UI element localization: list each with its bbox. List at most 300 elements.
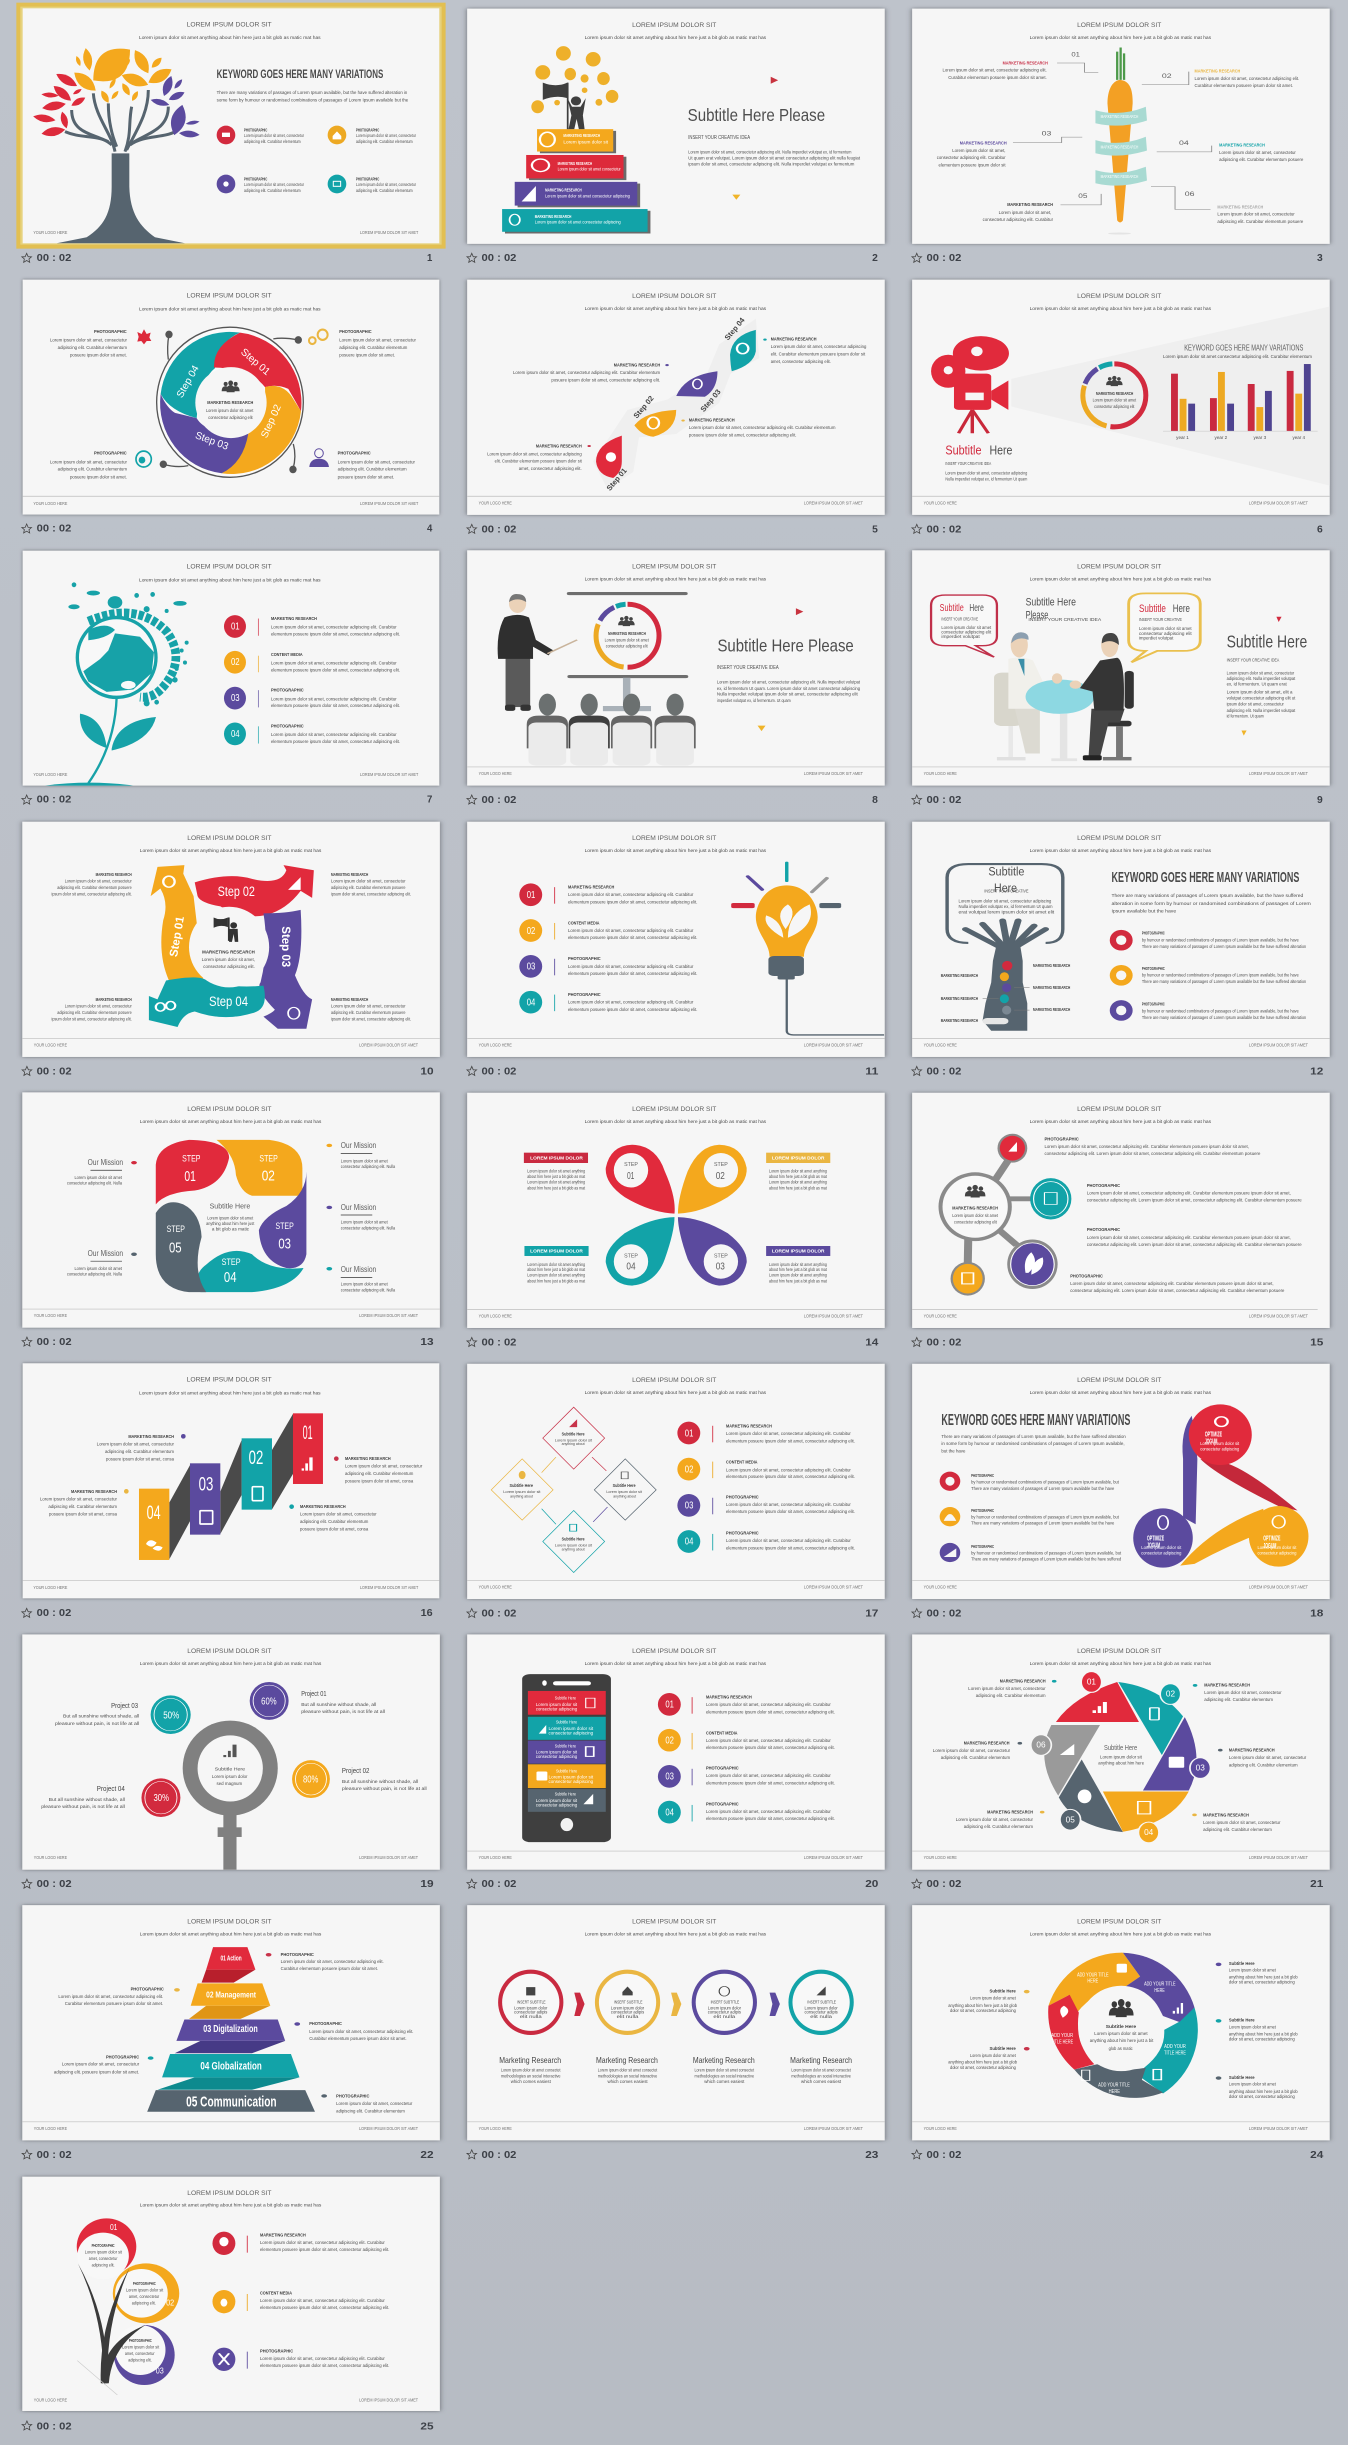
- items: PHOTOGRAPHIC: [1142, 931, 1165, 936]
- header: LOREM IPSUM DOLOR SIT: [632, 292, 717, 299]
- caption: 10: [420, 1066, 434, 1077]
- chart: linked circles: OPTIMIZE: [1147, 1535, 1164, 1543]
- chart: segmented ring: Lorem ipsum dolor sit amet: [1094, 2031, 1148, 2037]
- labels: about him here just a bit glob as mat: [769, 1186, 827, 1191]
- labels: consectetur adipiscing elit. Nulla: [67, 1181, 122, 1186]
- chart: arrow cycle: Step 02: [218, 884, 255, 900]
- footer: LOREM IPSUM DOLOR SIT AMET: [804, 501, 863, 506]
- chart: diamonds: [491, 1407, 656, 1572]
- chart: balloons: adipiscing elit.: [132, 2301, 156, 2306]
- chart: petals: 04: [626, 1261, 636, 1272]
- chart: segmented ring: glob as matic: [1109, 2046, 1133, 2051]
- chart: diamonds: anything about: [510, 1495, 533, 1499]
- labels: anything about him here just a bit glob: [948, 2003, 1017, 2008]
- caption: [22, 1608, 433, 1619]
- labels: Lorem ipsum dolor sit amet: [970, 1996, 1016, 2001]
- chart: balloons: PHOTOGRAPHIC: [133, 2281, 156, 2286]
- labels: PHOTOGRAPHIC: [94, 451, 127, 457]
- chart: pyramid: 01 Action: [220, 1955, 242, 1963]
- list: 04: [231, 729, 240, 740]
- caption: 00 : 02: [481, 1337, 517, 1348]
- labels: Marketing Research: [790, 2056, 852, 2065]
- labels: [524, 1153, 830, 1284]
- caption: 00 : 02: [37, 2149, 72, 2161]
- chart: arrow cycle: Step 04: [209, 995, 248, 1010]
- list: CONTENT MEDIA: [271, 652, 303, 658]
- header: Lorem ipsum dolor sit amet anything about him here just a bit glob as matic mat has: [1030, 848, 1211, 854]
- labels: adipiscing elit. Curabitur elementum: [941, 1756, 1010, 1761]
- caption: 00 : 02: [481, 252, 517, 264]
- footer: YOUR LOGO HERE: [479, 1855, 512, 1861]
- chart: diamonds: Lorem ipsum dolor sit: [555, 1438, 592, 1443]
- labels: 03: [1042, 130, 1051, 137]
- chart: segmented ring: ADD YOUR: [1164, 2043, 1186, 2049]
- paragraph: some form by humour or randomised combinations of passages of Lorem Ipsum available but the: [217, 97, 409, 102]
- items: adipiscing elit. Curabitur elementum: [356, 139, 413, 144]
- labels: adipiscing elit. Curabitur elementum: [1204, 1697, 1273, 1702]
- caption: [22, 2149, 434, 2161]
- chart: linked circles: OPTIMIZE: [1205, 1431, 1222, 1439]
- callout: red: Here: [969, 602, 984, 614]
- header: [1030, 834, 1211, 854]
- list: 02: [665, 1735, 674, 1746]
- labels: posuere ipsum dolor sit amet, consa: [300, 1526, 369, 1531]
- header: [140, 1105, 321, 1124]
- items: PHOTOGRAPHIC: [356, 176, 380, 181]
- footer: LOREM IPSUM DOLOR SIT AMET: [360, 230, 419, 235]
- icon: magnifier: Lorem ipsum dolor: [212, 1774, 247, 1780]
- list: 03: [231, 693, 240, 704]
- labels: posuere ipsum dolor sit amet.: [70, 353, 127, 358]
- subtitle block: ex, id fermentum. Ut quam erat: [1227, 682, 1287, 687]
- subtitle block: [717, 637, 860, 703]
- illustration: phone: consectetur adipiscing: [536, 1755, 578, 1760]
- header: [139, 563, 322, 583]
- labels: Lorem ipsum dolor sit amet anything: [769, 1273, 827, 1278]
- header: [139, 292, 322, 311]
- footer: LOREM IPSUM DOLOR SIT AMET: [360, 1585, 419, 1590]
- subtitle block: Subtitle Here Please: [688, 107, 825, 126]
- list: 04: [685, 1536, 693, 1548]
- caption: 00 : 02: [926, 1337, 962, 1348]
- chart: aperture: Lorem ipsum dolor sit: [1100, 1755, 1142, 1760]
- labels: Lorem ipsum dolor sit amet: [74, 1175, 122, 1180]
- header: LOREM IPSUM DOLOR SIT: [632, 1647, 717, 1654]
- labels: MARKETING RESEARCH: [96, 872, 132, 877]
- caption: [912, 794, 1323, 806]
- labels: adipiscing elit. Curabitur elementum: [1229, 1763, 1298, 1768]
- chart: rings: INSERT SUBTITLE: [614, 2000, 642, 2005]
- subtitle block: Here: [989, 443, 1012, 457]
- labels: ipsum dolor sit amet, consectetur adipiscing elit.: [331, 892, 411, 897]
- chart: linked circles: consectetur adipiscing: [1200, 1447, 1240, 1452]
- labels: Lorem ipsum dolor sit amet: [74, 1266, 122, 1271]
- chart: rising blocks: 03: [199, 1474, 213, 1495]
- labels: Lorem ipsum dolor sit amet, consectetur: [97, 1441, 175, 1446]
- slide 11: light bulb: [467, 822, 885, 1077]
- header: Lorem ipsum dolor sit amet anything about him here just a bit glob as matic mat has: [585, 306, 766, 311]
- chart: petals: 03: [716, 1261, 725, 1272]
- illustration: tree with frame: MARKETING RESEARCH: [941, 1018, 978, 1023]
- list: PHOTOGRAPHIC: [726, 1495, 759, 1500]
- labels: [52, 872, 411, 1022]
- caption: 00 : 02: [37, 1066, 72, 1077]
- illustration: phone: Subtitle Here: [555, 1792, 576, 1797]
- callout: gold: [1129, 593, 1200, 662]
- caption: 00 : 02: [37, 2420, 72, 2432]
- labels: 05: [1078, 192, 1087, 200]
- caption: 21: [1310, 1878, 1323, 1890]
- header: LOREM IPSUM DOLOR SIT: [187, 1647, 272, 1654]
- chart: segmented ring: TITLE HERE: [1051, 2038, 1073, 2045]
- illustration: board with donut: Lorem ipsum dolor sit amet: [605, 638, 649, 643]
- slide 6: camera and bars: Lorem ipsum dolor sit amet, consectetur adipiscing: [945, 471, 1028, 476]
- labels: consectetur adipiscing elit. Nulla: [341, 1226, 396, 1231]
- list: elementum posuere ipsum dolor sit amet, consectetur adipiscing elit.: [726, 1475, 855, 1480]
- footer: YOUR LOGO HERE: [33, 772, 67, 777]
- icon: markers: [1241, 617, 1282, 736]
- illustration: board with donut: MARKETING RESEARCH: [608, 631, 646, 636]
- illustration: audience: [527, 694, 696, 766]
- connectors: [163, 334, 298, 469]
- chart: molecule: consectetur adipiscing elit: [954, 1220, 997, 1225]
- labels: Lorem ipsum dolor sit amet anything: [527, 1262, 586, 1267]
- labels: Lorem ipsum dolor sit amet consectet: [501, 2068, 561, 2073]
- footer: [912, 2122, 1330, 2131]
- header: LOREM IPSUM DOLOR SIT: [187, 2189, 272, 2196]
- chart: molecule: [939, 1134, 1071, 1296]
- labels: consectetur adipiscing elit. Nulla: [341, 1165, 396, 1170]
- caption: [912, 1608, 1323, 1619]
- footer: LOREM IPSUM DOLOR SIT AMET: [804, 771, 863, 776]
- labels: about him here just a bit glob as mat: [769, 1279, 827, 1284]
- chart: rings: Lorem ipsum dolor: [611, 2006, 644, 2011]
- center text: consectetur adipiscing elit.: [203, 964, 255, 970]
- chart: petals: STEP: [624, 1252, 638, 1259]
- chart: five step shapes: 04: [224, 1270, 237, 1286]
- chart: balloons: adipiscing elit.: [92, 2263, 115, 2268]
- chart: percent bubbles: 30%: [153, 1792, 169, 1803]
- header: LOREM IPSUM DOLOR SIT: [187, 1105, 272, 1112]
- labels: MARKETING RESEARCH: [964, 1741, 1010, 1746]
- items: PHOTOGRAPHIC: [1142, 966, 1165, 971]
- chart: rising blocks: 02: [249, 1448, 263, 1469]
- list: elementum posuere ipsum dolor sit amet, consectetur adipiscing elit.: [271, 631, 400, 637]
- labels: Marketing Research: [499, 2056, 561, 2065]
- chart: segmented ring: TITLE HERE: [1164, 2049, 1186, 2056]
- chart: balloons: Lorem ipsum dolor sit: [126, 2288, 163, 2293]
- slide 24: segmented ring: [912, 1905, 1330, 2161]
- labels: Lorem ipsum dolor sit amet anything: [527, 1169, 586, 1174]
- chart: rings: INSERT SUBTITLE: [807, 2000, 836, 2005]
- chart: circular steps: Lorem ipsum dolor sit amet: [206, 408, 254, 413]
- labels: PHOTOGRAPHIC: [1087, 1228, 1120, 1233]
- labels: Lorem ipsum dolor sit amet: [341, 1159, 388, 1164]
- footer: YOUR LOGO HERE: [33, 501, 67, 506]
- header: [140, 1918, 321, 1937]
- chart: diamonds: anything about: [613, 1495, 636, 1499]
- chart: rings: Lorem ipsum dolor: [708, 2006, 741, 2011]
- chart: bars: year 4: [1292, 436, 1305, 441]
- labels: Lorem ipsum dolor sit amet, consectetur: [50, 337, 128, 342]
- list: Lorem ipsum dolor sit amet, consectetur adipiscing elit. Curabitur: [271, 660, 397, 666]
- caption: 15: [1310, 1337, 1323, 1348]
- illustration: board with donut: consectetur adipiscing elit: [606, 644, 648, 649]
- slide 12: hand tree: MARKETING RESEARCH: [1033, 963, 1070, 968]
- labels: Lorem ipsum dolor sit amet: [1229, 2025, 1276, 2030]
- caption: 00 : 02: [481, 1066, 517, 1077]
- list: CONTENT MEDIA: [260, 2291, 292, 2296]
- labels: adipiscing elit. posuere ipsum dolor sit amet.: [54, 2070, 139, 2075]
- labels: posuere ipsum dolor sit amet, consectetur adipiscing elit.: [689, 433, 797, 438]
- labels: 02: [1162, 72, 1172, 79]
- slide 21: aperture: [912, 1634, 1330, 1890]
- list: elementum posuere ipsum dolor sit amet, consectetur adipiscing elit.: [706, 1817, 835, 1822]
- caption: 12: [1310, 1066, 1323, 1077]
- chart: segmented ring: HERE: [1109, 2088, 1120, 2094]
- list: elementum posuere ipsum dolor sit amet, consectetur adipiscing elit.: [726, 1546, 855, 1551]
- callout: red: Lorem ipsum dolor sit amet: [941, 625, 991, 630]
- illustration: presenter: [498, 594, 577, 711]
- center text: MARKETING RESEARCH: [202, 950, 255, 955]
- caption: 00 : 02: [926, 2149, 962, 2161]
- header: [585, 1647, 766, 1666]
- chart: circular steps: Step 02: [259, 403, 284, 440]
- chart: aperture: 04: [1144, 1828, 1153, 1837]
- list: Lorem ipsum dolor sit amet, consectetur adipiscing elit. Curabitur: [260, 2298, 385, 2303]
- header: [1030, 1376, 1211, 1396]
- stair blocks: MARKETING RESEARCH: [563, 133, 600, 139]
- illustration: tree with frame: Lorem ipsum dolor sit amet, consectetur adipiscing: [959, 899, 1052, 904]
- list: [224, 615, 400, 745]
- chart: five step shapes: STEP: [182, 1153, 200, 1164]
- labels: adipiscing elit. Curabitur elementum: [336, 2109, 405, 2114]
- footer: YOUR LOGO HERE: [479, 2126, 512, 2131]
- labels: Lorem ipsum dolor sit amet, consectetur adipiscing: [487, 452, 582, 457]
- chart: balloons: 01: [110, 2222, 118, 2232]
- labels: adipiscing elit. Curabitur elementum: [48, 1504, 117, 1509]
- labels: PHOTOGRAPHIC: [106, 2055, 139, 2060]
- labels: MARKETING RESEARCH: [689, 418, 735, 423]
- caption: 11: [865, 1066, 878, 1077]
- stair blocks: MARKETING RESEARCH: [535, 214, 572, 220]
- subtitle block: id fermentum. Ut quam: [1227, 714, 1264, 719]
- labels: adipiscing elit. Curabitur elementum posuere: [331, 885, 406, 890]
- labels: dolor sit amet, consectetur adipiscing: [950, 2065, 1016, 2070]
- footer: [22, 2122, 440, 2131]
- labels: about him here just a bit glob as mat: [527, 1175, 585, 1180]
- slide 12: hand tree: MARKETING RESEARCH: [1033, 1008, 1070, 1013]
- chart: five step shapes: Subtitle Here: [210, 1203, 250, 1211]
- footer: [467, 1851, 885, 1861]
- chart: circular steps: [157, 327, 303, 477]
- subtitle block: INSERT YOUR CREATIVE IDEA: [717, 665, 779, 670]
- slide 7: globe flower: [22, 551, 439, 806]
- labels: Lorem ipsum dolor sit amet, consectetur adipiscing: [771, 345, 867, 350]
- caption: 24: [1310, 2149, 1323, 2161]
- labels: consectetur adipiscing elit. Nulla: [341, 1288, 396, 1293]
- footer: [34, 2398, 418, 2403]
- labels: [937, 51, 1304, 224]
- illustration: tree with frame: MARKETING RESEARCH: [941, 996, 978, 1001]
- chart: rings: [498, 1970, 854, 2035]
- chart: leaf steps: [593, 315, 759, 493]
- chart: five step shapes: Lorem ipsum dolor sit amet: [207, 1216, 253, 1221]
- header: [585, 1376, 766, 1396]
- footer: YOUR LOGO HERE: [924, 1314, 957, 1319]
- caption: [912, 1337, 1323, 1348]
- caption: [912, 1066, 1323, 1077]
- list: Lorem ipsum dolor sit amet, consectetur adipiscing elit. Curabitur: [568, 964, 693, 969]
- list: Lorem ipsum dolor sit amet, consectetur adipiscing elit. Curabitur: [260, 2241, 385, 2245]
- caption: 00 : 02: [37, 1878, 72, 1890]
- stair blocks: [502, 129, 650, 234]
- labels: [487, 337, 867, 472]
- chart: balloons: amet, consectetur: [89, 2256, 117, 2261]
- labels: dolor sit amet, consectetur adipiscing: [1229, 1980, 1295, 1985]
- caption: 00 : 02: [926, 524, 962, 535]
- items: There are many variations of passages of Lorem Ipsum available but the have: [971, 1521, 1115, 1526]
- callout: red: consectetur adipiscing elit: [941, 630, 991, 635]
- subtitle block: Lorem ipsum dolor sit amet, consectetur adipiscing elit. Nulla imperdiet volutpat: [717, 680, 860, 685]
- chart: linked circles: consectetur adipiscing: [1141, 1551, 1182, 1556]
- list: CONTENT MEDIA: [568, 921, 600, 926]
- list: PHOTOGRAPHIC: [271, 688, 304, 694]
- header: [1030, 21, 1211, 40]
- labels: pleasure without pain, is not life at all: [41, 1804, 125, 1810]
- labels: Curabitur elementum posuere ipsum dolor sit amet.: [65, 2001, 163, 2007]
- labels: adipiscing elit. Curabitur elementum posuere: [57, 1010, 132, 1015]
- labels: Lorem ipsum dolor sit amet, consectetur adipiscing elit. Curabitur elementum: [513, 370, 660, 376]
- list: elementum posuere ipsum dolor sit amet, consectetur adipiscing elit.: [568, 971, 698, 976]
- footer: LOREM IPSUM DOLOR SIT AMET: [804, 1585, 863, 1590]
- caption: [22, 1878, 434, 1890]
- labels: adipiscing elit. Curabitur elementum: [338, 467, 407, 472]
- labels: Project 04: [97, 1785, 125, 1793]
- labels: MARKETING RESEARCH: [614, 363, 660, 368]
- header: [1030, 563, 1211, 582]
- labels: pleasure without pain, is not life at all: [55, 1721, 139, 1726]
- labels: [40, 1434, 423, 1531]
- labels: [50, 329, 416, 480]
- chart: molecule: Lorem ipsum dolor sit amet: [952, 1213, 998, 1218]
- chart: balloons: 02: [166, 2298, 174, 2308]
- paragraph: in some form by humour or randomised combinations of passages of Lorem Ipsum available,: [941, 1441, 1125, 1447]
- labels: elit. Curabitur elementum posuere ipsum dolor sit: [771, 352, 865, 357]
- chart: rings: Lorem ipsum dolor: [514, 2006, 547, 2011]
- header: LOREM IPSUM DOLOR SIT: [1077, 21, 1162, 28]
- illustration: phone: Lorem ipsum dolor sit: [536, 1750, 577, 1755]
- chart: rings: Lorem ipsum dolor: [805, 2006, 838, 2011]
- labels: MARKETING RESEARCH: [1000, 1679, 1046, 1684]
- list: Lorem ipsum dolor sit amet, consectetur adipiscing elit. Curabitur: [706, 1809, 831, 1814]
- labels: methodologies an social interactive: [791, 2074, 851, 2079]
- subtitle block: imperdiet volutpat ex, id fermentum. Ut quam: [717, 698, 791, 703]
- header: Lorem ipsum dolor sit amet anything about him here just a bit glob as matic mat has: [585, 577, 766, 582]
- items: PHOTOGRAPHIC: [971, 1474, 994, 1479]
- header: [585, 1918, 766, 1937]
- chart: bars: [1163, 364, 1318, 441]
- header: Lorem ipsum dolor sit amet anything about him here just a bit glob as matic mat has: [1030, 306, 1211, 311]
- chart: segmented ring: ADD YOUR TITLE: [1098, 2081, 1130, 2088]
- subtitle block: Lorem ipsum dolor sit amet, consectetur adipiscing elit. Nulla imperdiet volutpat ex, id fermentum: [688, 150, 851, 155]
- icon: coins and flag figure: [531, 46, 618, 129]
- subtitle block: Subtitle Here Please: [717, 637, 854, 656]
- chart: five step shapes: 05: [169, 1240, 182, 1256]
- chart: rings: elit nulla: [617, 2015, 639, 2020]
- labels: Lorem ipsum dolor sit amet, consectetur adipiscing elit.: [309, 2029, 414, 2034]
- labels: MARKETING RESEARCH: [1219, 143, 1265, 148]
- subtitle block: ipsum dolor sit amet, consectetur adipiscing elit. Nulla imperdiet volutpat ex fermentum: [688, 162, 854, 167]
- labels: MARKETING RESEARCH: [1229, 1748, 1275, 1753]
- footer: YOUR LOGO HERE: [33, 1585, 67, 1590]
- labels: PHOTOGRAPHIC: [1070, 1274, 1103, 1279]
- labels: MARKETING RESEARCH: [987, 1810, 1033, 1815]
- caption: [912, 252, 1323, 264]
- caption: 00 : 02: [37, 1336, 72, 1348]
- items: There are many variations of passages of Lorem Ipsum available but the have suffered: [971, 1557, 1122, 1562]
- icons: [136, 329, 329, 467]
- header: Lorem ipsum dolor sit amet anything about him here just a bit glob as matic mat has: [139, 35, 321, 40]
- footer: [34, 1855, 418, 1861]
- slide 10: arrow cycle: [22, 822, 440, 1077]
- caption: 4: [427, 523, 433, 535]
- list: elementum posuere ipsum dolor sit amet, consectetur adipiscing elit.: [260, 2305, 390, 2310]
- labels: LOREM IPSUM DOLOR: [530, 1156, 583, 1161]
- labels: PHOTOGRAPHIC: [338, 451, 371, 457]
- icon: triangles: [732, 77, 778, 200]
- header: LOREM IPSUM DOLOR SIT: [187, 834, 272, 842]
- subtitle block: [1227, 633, 1307, 719]
- header: LOREM IPSUM DOLOR SIT: [187, 563, 272, 570]
- labels: Lorem ipsum dolor sit amet, consectetur adipiscing elit.: [58, 1994, 163, 1999]
- footer: YOUR LOGO HERE: [34, 1043, 67, 1048]
- labels: Lorem ipsum dolor sit amet, consectetur: [339, 337, 416, 342]
- labels: But all sunshine without shade, all: [63, 1714, 139, 1719]
- stair blocks: MARKETING RESEARCH: [545, 188, 582, 193]
- labels: dolor sit amet, consectetur adipiscing: [1229, 2094, 1295, 2100]
- header: [1030, 1647, 1211, 1666]
- header: Lorem ipsum dolor sit amet anything about him here just a bit glob as matic mat has: [140, 1932, 321, 1937]
- footer: YOUR LOGO HERE: [33, 230, 67, 235]
- labels: Lorem ipsum dolor sit amet, consectetur adipiscing elit.: [943, 68, 1047, 73]
- header: Lorem ipsum dolor sit amet anything about him here just a bit glob as matic mat has: [585, 848, 766, 854]
- labels: Lorem ipsum dolor sit amet consectet: [598, 2068, 657, 2073]
- labels: adipiscing elit. Curabitur elementum: [964, 1824, 1033, 1830]
- labels: Lorem ipsum dolor sit amet, consectetur: [40, 1496, 118, 1501]
- items: adipiscing elit. Curabitur elementum: [244, 139, 301, 144]
- illustration: handshake meeting: [994, 632, 1134, 761]
- illustration: globe flower: [45, 582, 189, 786]
- labels: Subtitle Here: [1229, 2018, 1255, 2023]
- subtitle block: INSERT YOUR CREATIVE IDEA: [688, 135, 750, 140]
- chart: petals: STEP: [714, 1252, 728, 1259]
- header: [585, 1105, 766, 1125]
- slide 13: five steps: [22, 1092, 440, 1348]
- list: Lorem ipsum dolor sit amet, consectetur adipiscing elit. Curabitur: [271, 732, 397, 737]
- illustration: phone: consectetur adipiscing: [536, 1803, 578, 1808]
- chart: five step shapes: anything about him here just: [206, 1221, 254, 1227]
- paragraph: Ipsum available but the have: [1111, 909, 1177, 914]
- chart: aperture: [1031, 1672, 1211, 1843]
- chart: percent bubbles: [141, 1682, 330, 1817]
- header: Lorem ipsum dolor sit amet anything about him here just a bit glob as matic mat has: [140, 2203, 321, 2208]
- stair blocks: MARKETING RESEARCH: [558, 161, 592, 166]
- chart: percent bubbles: 50%: [163, 1710, 179, 1721]
- labels: ipsum dolor sit amet, consectetur adipiscing elit.: [331, 1017, 411, 1022]
- footer: [912, 767, 1330, 776]
- center text: [202, 950, 255, 970]
